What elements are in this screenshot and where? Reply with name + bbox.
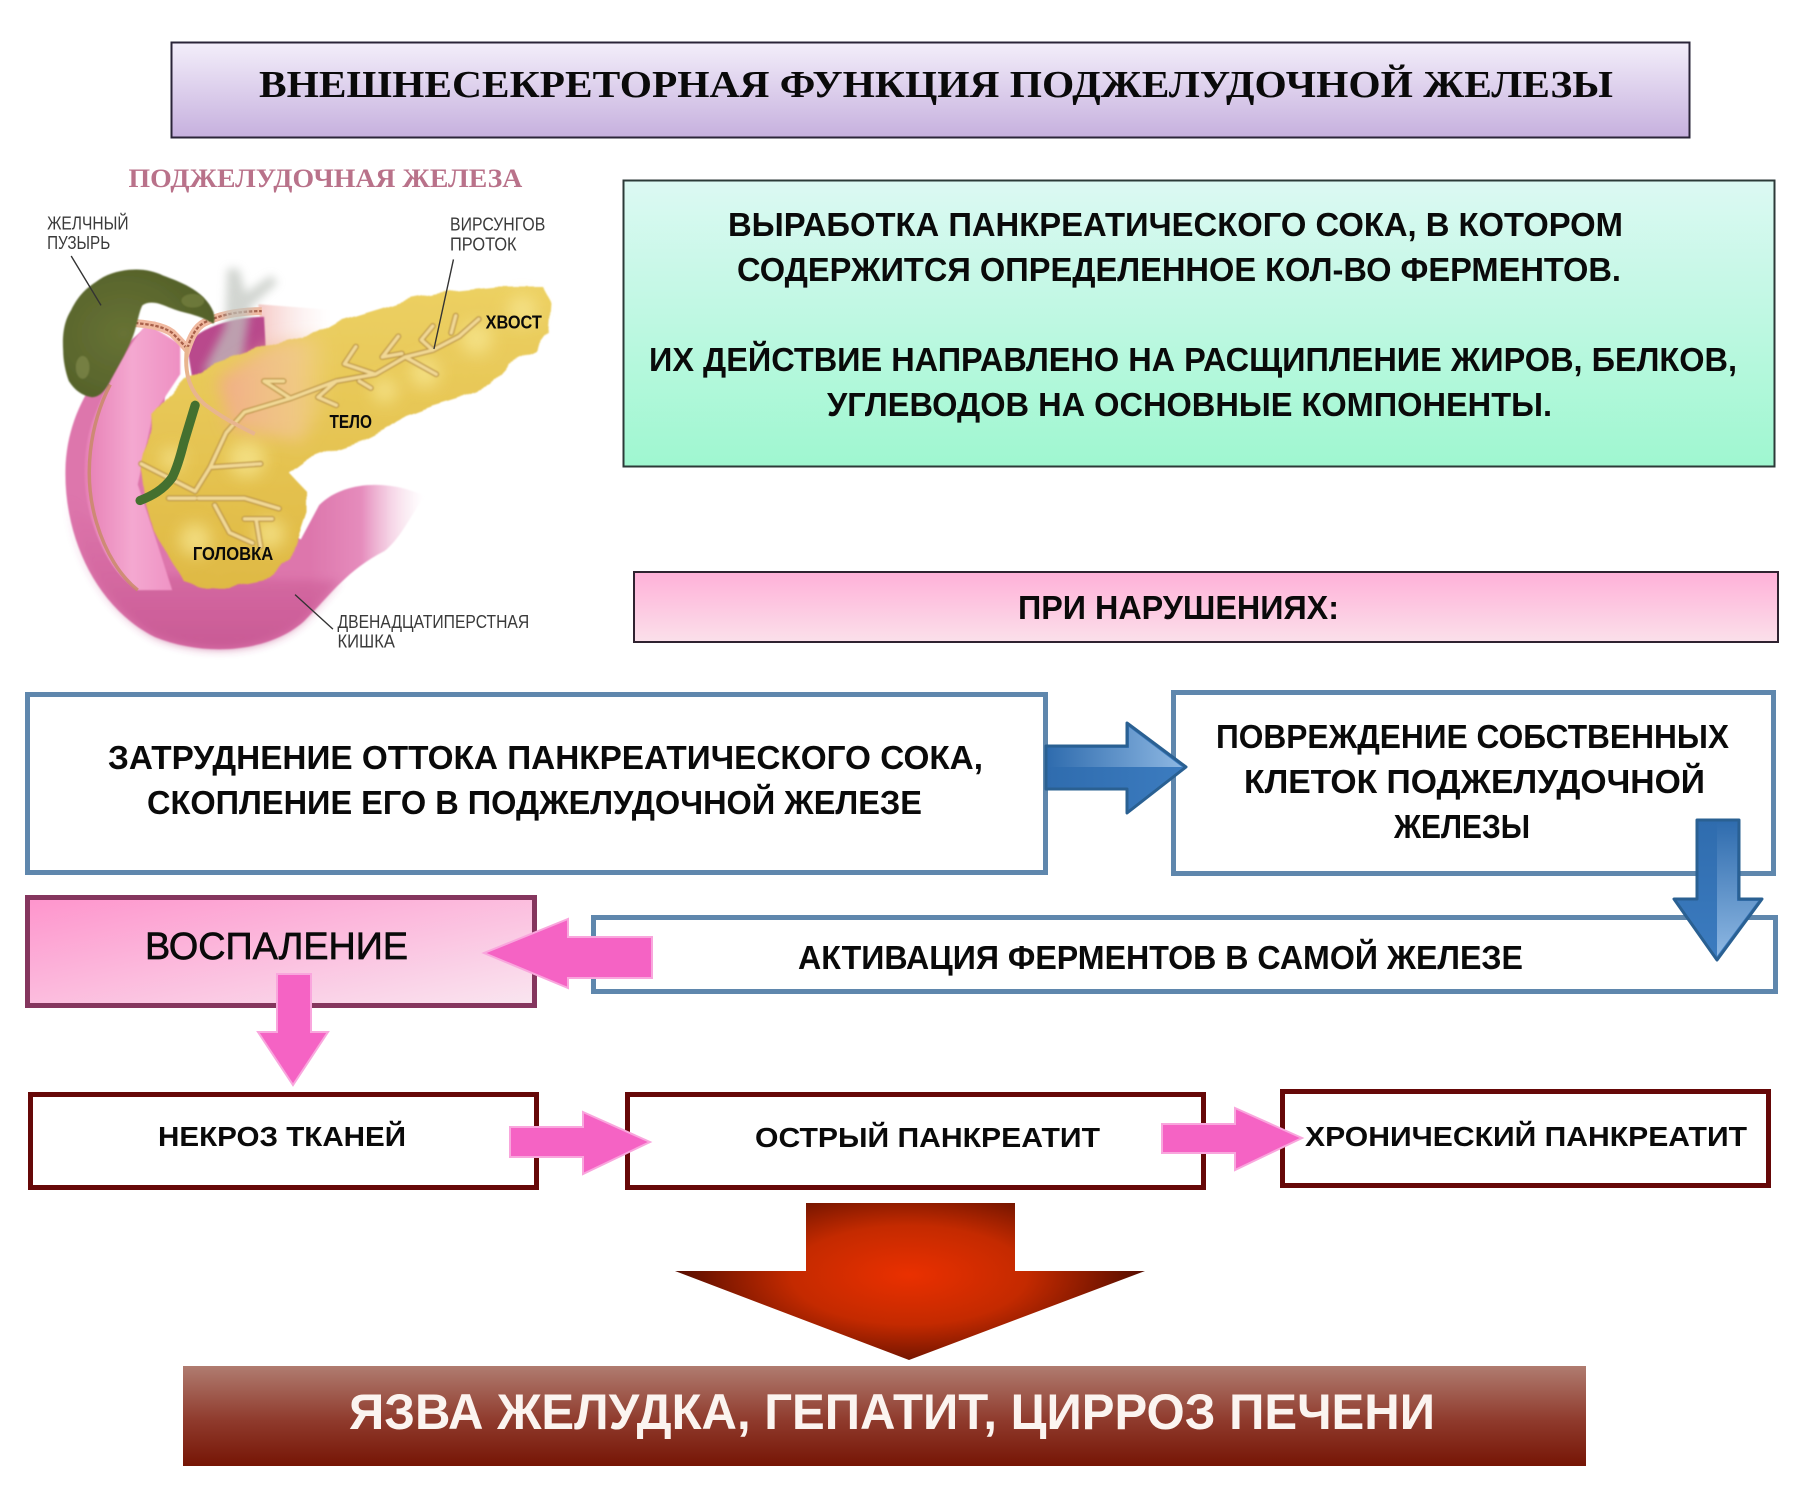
title panel: ВНЕШНЕСЕКРЕТОРНАЯ ФУНКЦИЯ ПОДЖЕЛУДОЧНОЙ ЖЕЛЕЗЫ [259, 64, 1613, 106]
panel: pancreatic juice description: ИХ ДЕЙСТВИЕ НАПРАВЛЕНО НА РАСЩИПЛЕНИЕ ЖИРОВ, БЕЛКОВ, [649, 340, 1737, 378]
stomach segment [187, 317, 266, 396]
heading: disorders [634, 572, 1778, 642]
anatomical labels: ГОЛОВКА [193, 543, 273, 564]
box: cell damage: КЛЕТОК ПОДЖЕЛУДОЧНОЙ [1244, 762, 1705, 800]
box: obstructed outflow [28, 694, 1046, 872]
translucent overlap region [218, 335, 333, 442]
bile duct [140, 405, 195, 501]
anatomical labels: ЖЕЛЧНЫЙ [47, 213, 129, 234]
arrow: pink right to acute pancreatitis [510, 1112, 650, 1174]
arrow: pink left [484, 919, 652, 988]
box: tissue necrosis [30, 1094, 536, 1188]
anatomical labels: ПУЗЫРЬ [47, 232, 110, 253]
anatomical labels: ТЕЛО [329, 411, 372, 432]
title panel [172, 42, 1690, 138]
box: cell damage: ПОВРЕЖДЕНИЕ СОБСТВЕННЫХ [1216, 718, 1729, 755]
box: cell damage [1174, 692, 1774, 874]
gallbladder [63, 269, 214, 397]
anatomical labels: ПРОТОК [450, 233, 517, 254]
leader lines [71, 256, 453, 629]
box: enzyme activation [594, 918, 1776, 992]
anatomical labels: ДВЕНАДЦАТИПЕРСТНАЯ [338, 611, 529, 632]
bar: complications: ЯЗВА ЖЕЛУДКА, ГЕПАТИТ, ЦИРРОЗ ПЕЧЕНИ [349, 1384, 1435, 1440]
arrow: blue down [1674, 820, 1762, 960]
arrow: large red down [675, 1203, 1145, 1360]
stomach wall detail [130, 311, 262, 349]
illustration title: ПОДЖЕЛУДОЧНАЯ ЖЕЛЕЗА [129, 163, 522, 193]
box: obstructed outflow: ЗАТРУДНЕНИЕ ОТТОКА ПАНКРЕАТИЧЕСКОГО СОКА, [108, 739, 983, 776]
pancreas gland [141, 287, 551, 588]
arrow: pink right to chronic pancreatitis [1162, 1108, 1302, 1170]
panel: pancreatic juice description: СОДЕРЖИТСЯ ОПРЕДЕЛЕННОЕ КОЛ-ВО ФЕРМЕНТОВ. [737, 251, 1621, 288]
box: acute pancreatitis: ОСТРЫЙ ПАНКРЕАТИТ [755, 1121, 1100, 1153]
anatomical labels: ХВОСТ [486, 311, 543, 332]
accessory duct junction [186, 347, 255, 434]
anatomical labels [47, 213, 545, 651]
box: enzyme activation: АКТИВАЦИЯ ФЕРМЕНТОВ В САМОЙ ЖЕЛЕЗЕ [798, 938, 1523, 976]
panel: pancreatic juice description: УГЛЕВОДОВ НА ОСНОВНЫЕ КОМПОНЕНТЫ. [827, 386, 1552, 423]
anatomical labels: ВИРСУНГОВ [450, 214, 545, 235]
peach interior [204, 351, 276, 427]
box: chronic pancreatitis [1282, 1092, 1768, 1186]
arrow: blue right [1046, 723, 1186, 813]
panel: pancreatic juice description [624, 180, 1774, 466]
panel: pancreatic juice description: ВЫРАБОТКА ПАНКРЕАТИЧЕСКОГО СОКА, В КОТОРОМ [728, 206, 1623, 243]
box: inflammation: ВОСПАЛЕНИЕ [145, 926, 408, 968]
box: chronic pancreatitis: ХРОНИЧЕСКИЙ ПАНКРЕАТИТ [1305, 1120, 1747, 1152]
heading: disorders: ПРИ НАРУШЕНИЯХ: [1018, 589, 1339, 626]
pancreatic ducts [141, 316, 479, 546]
duodenal wall line [89, 385, 138, 590]
box: inflammation [28, 898, 534, 1006]
duodenum [65, 321, 425, 649]
arrow: pink down [258, 974, 328, 1085]
grey vessels [202, 269, 278, 373]
box: acute pancreatitis [628, 1094, 1204, 1188]
box: tissue necrosis: НЕКРОЗ ТКАНЕЙ [158, 1120, 406, 1152]
anatomical illustration: pancreas [47, 163, 551, 651]
inner duodenum fold [84, 324, 180, 590]
anatomical labels: КИШКА [338, 630, 396, 651]
stomach wall band [130, 311, 262, 349]
pale stomach overlap [258, 304, 333, 367]
box: obstructed outflow: СКОПЛЕНИЕ ЕГО В ПОДЖЕЛУДОЧНОЙ ЖЕЛЕЗЕ [147, 783, 922, 821]
bar: complications [183, 1366, 1586, 1466]
box: cell damage: ЖЕЛЕЗЫ [1393, 808, 1530, 845]
